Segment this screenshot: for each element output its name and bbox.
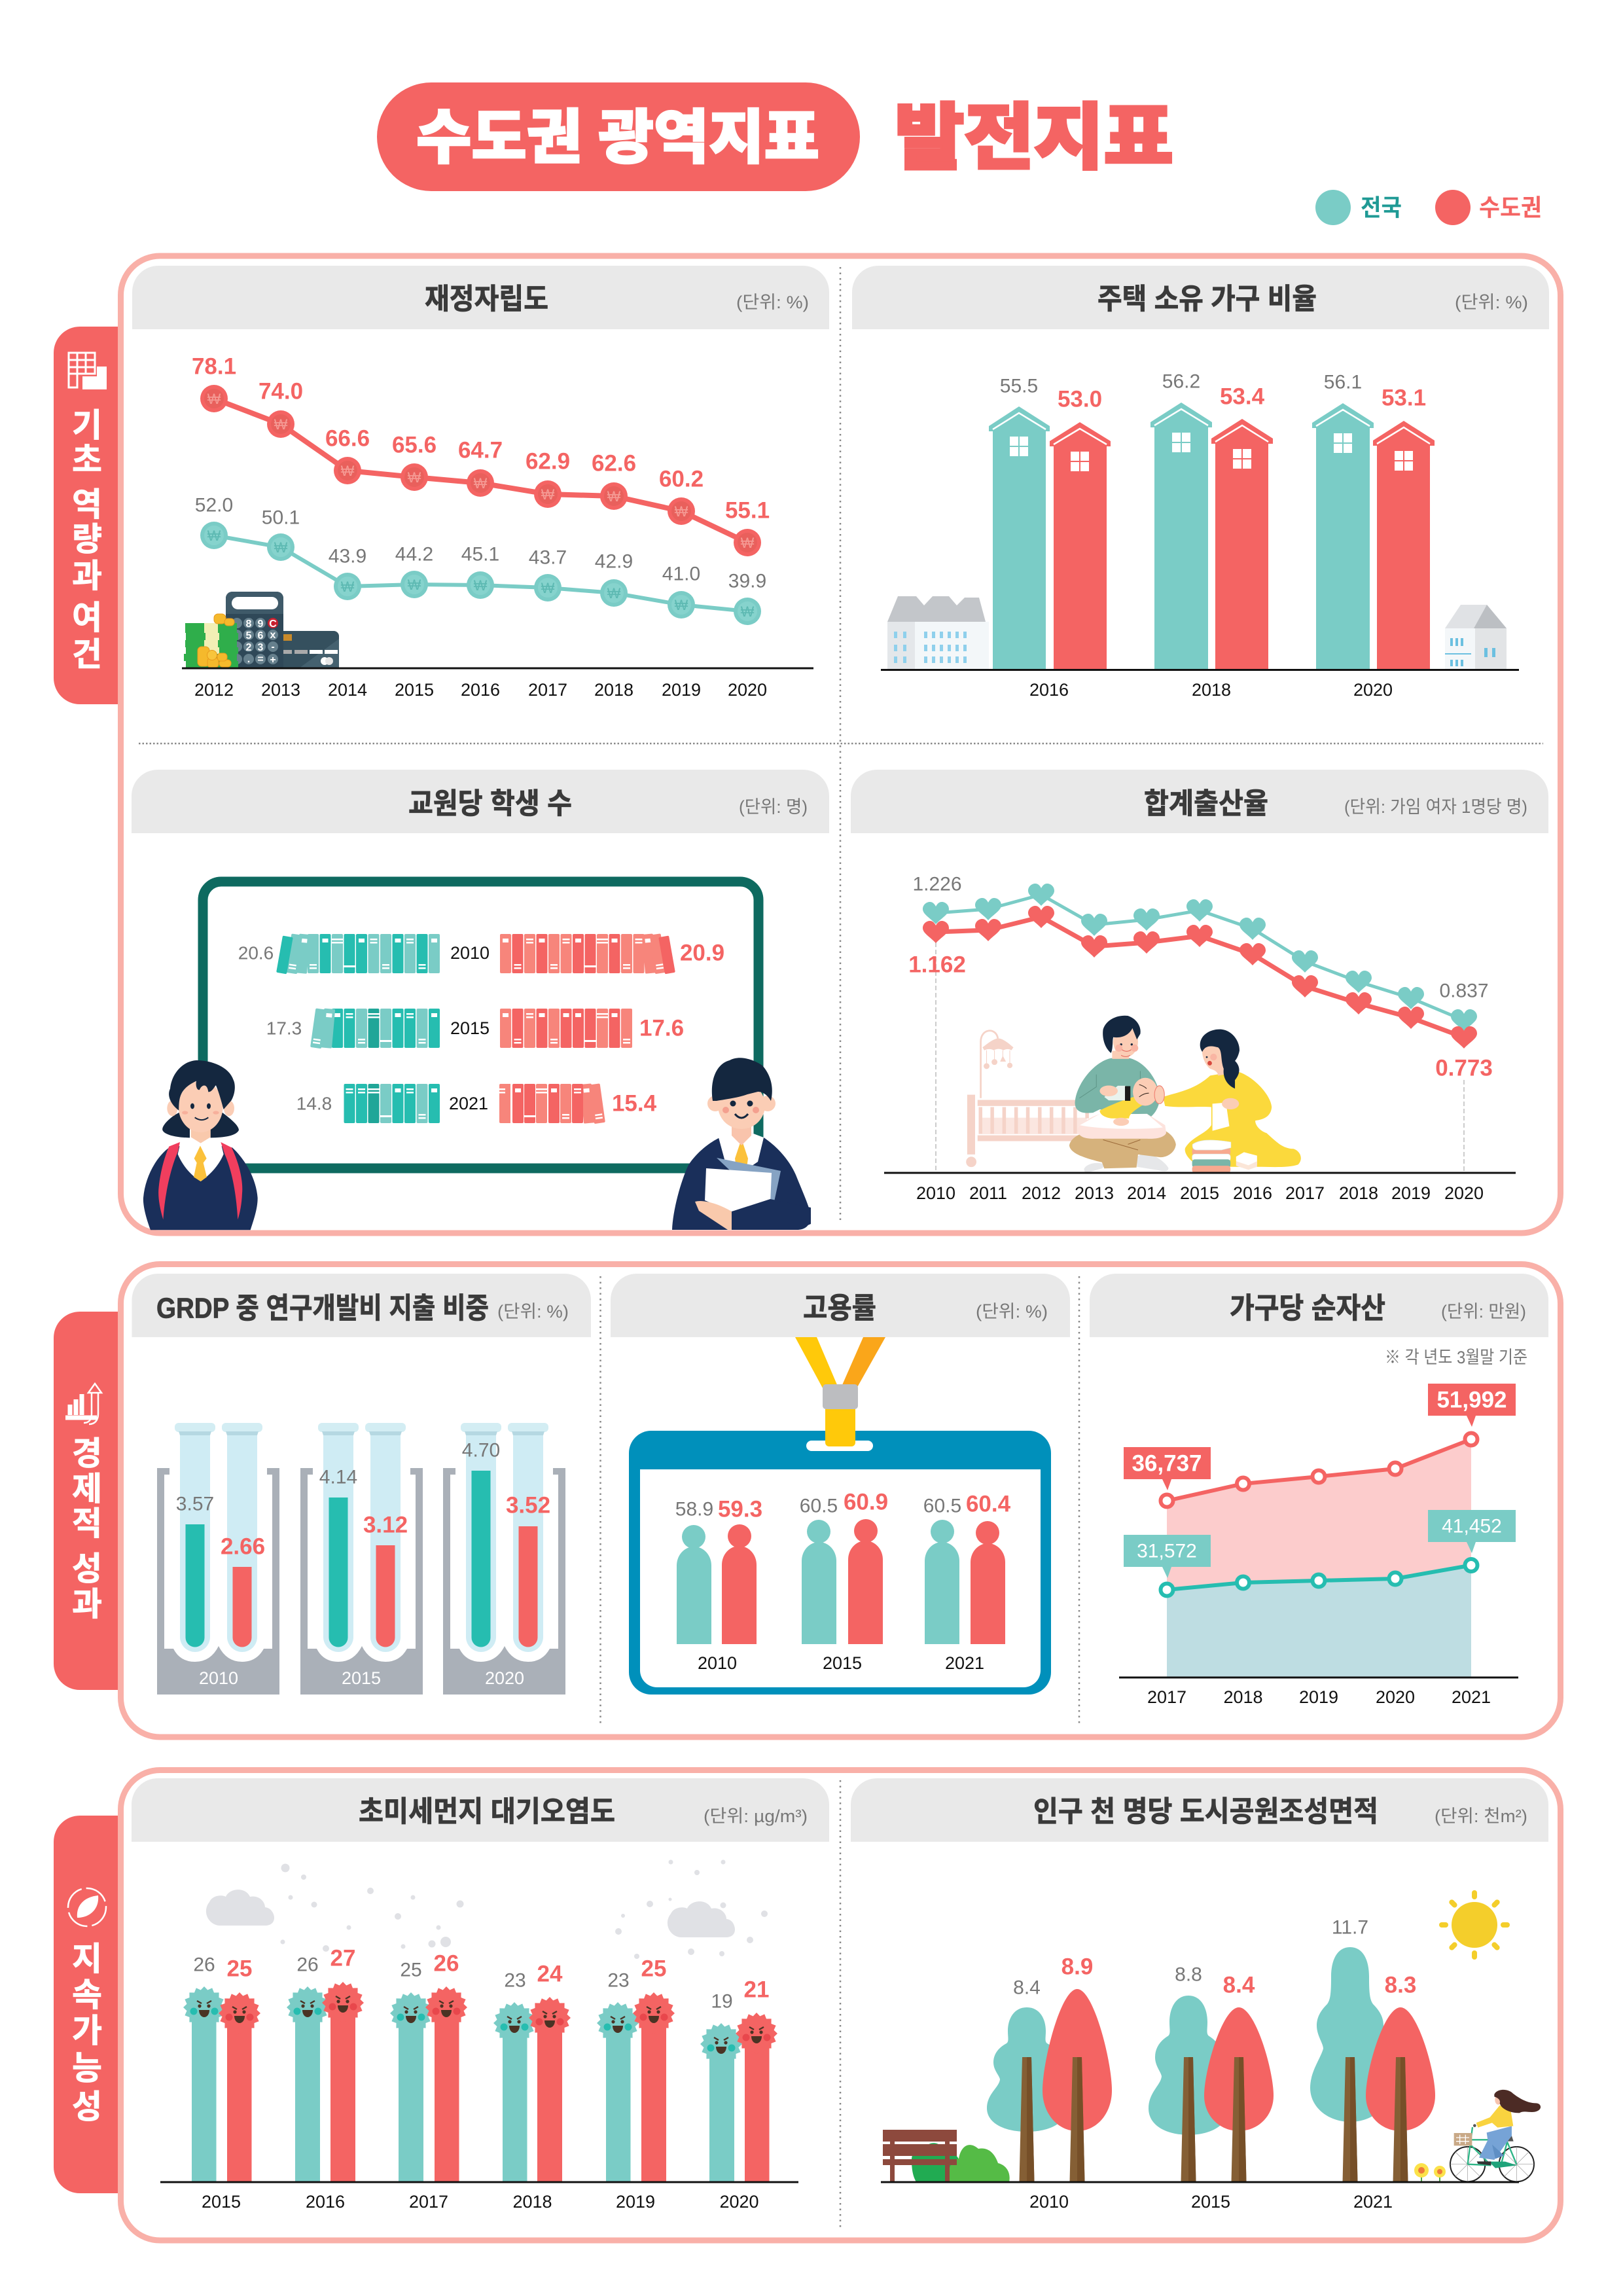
house bars (989, 403, 1435, 670)
chart: 재정자립도: 65.6 (392, 432, 437, 458)
legend: 수도권 (1479, 194, 1542, 221)
chart: GRDP 중 연구개발비 지출 비중: 4.14 (319, 1466, 357, 1488)
chart: 가구당 순자산: 가구당 순자산 (1230, 1292, 1385, 1325)
chart: 재정자립도 (132, 266, 829, 700)
chart: 합계출산율: 2014 (1127, 1183, 1166, 1203)
icon: calculator, money and card: 2 (246, 642, 252, 653)
chart: 초미세먼지 대기오염도: 2019 (616, 2192, 655, 2212)
chart: 초미세먼지 대기오염도: 2015 (202, 2192, 241, 2212)
chart: 초미세먼지 대기오염도: 19 (711, 1991, 733, 2012)
books row 2021: 2021 (449, 1094, 488, 1113)
callout: 51,992: 51,992 (1436, 1388, 1507, 1412)
chart: 재정자립도: 재정자립도 (425, 283, 548, 315)
chart: GRDP 중 연구개발비 지출 비중: 2015 (342, 1668, 381, 1688)
chart: 합계출산율: 2020 (1444, 1183, 1484, 1203)
chart: 초미세먼지 대기오염도: 23 (607, 1970, 630, 1991)
legend: 전국 (1361, 194, 1402, 221)
chart: 재정자립도: 45.1 (461, 543, 499, 565)
chart: 가구당 순자산 (1090, 1274, 1548, 1707)
section tab: 지속가능성: 속 (72, 1977, 102, 2013)
chart: 주택 소유 가구 비율: (단위: %) (1455, 293, 1528, 312)
chart: 합계출산율: 2013 (1075, 1183, 1114, 1203)
icon: calculator, money and card: . (247, 654, 250, 665)
books row 2021: 15.4 (612, 1090, 657, 1117)
panel: 지속가능성 (120, 1770, 1560, 2240)
icon: right house (1445, 605, 1507, 670)
section tab: 경제적 성과: 제 (72, 1471, 102, 1507)
chart: 재정자립도: 2015 (395, 680, 434, 700)
section tab: 기초 역량과 여건: 기 (72, 407, 102, 444)
chart: 재정자립도: 62.6 (592, 450, 636, 476)
chart: 고용률: 2015 (823, 1653, 862, 1673)
chart: 인구 천 명당 도시공원조성면적: 인구 천 명당 도시공원조성면적 (1033, 1796, 1378, 1827)
section tab: 기초 역량과 여건: 초 (72, 442, 102, 478)
icon: calculator, money and card: 6 (258, 630, 264, 641)
chart: GRDP 중 연구개발비 지출 비중: 2010 (199, 1668, 238, 1688)
chart: GRDP 중 연구개발비 지출 비중: 4.70 (462, 1440, 500, 1461)
chart: 초미세먼지 대기오염도: 25 (641, 1956, 666, 1982)
section tab: 기초 역량과 여건: 역 (72, 486, 102, 523)
chart: 인구 천 명당 도시공원조성면적: 8.3 (1385, 1973, 1416, 1998)
section tab: 기초 역량과 여건: 량 (72, 521, 102, 558)
icon: calculator, money and card: = (257, 654, 264, 665)
icon: left building (887, 596, 989, 670)
chart: 교원당 학생 수 (132, 770, 829, 1230)
books row 2021 (296, 1083, 657, 1124)
chart: 초미세먼지 대기오염도 (132, 1778, 829, 2212)
chart: 가구당 순자산: 2019 (1299, 1687, 1338, 1707)
panel: 경제적 성과 (120, 1265, 1560, 1737)
icon: calculator, money and card: C (269, 619, 277, 630)
chart: 고용률: (단위: %) (976, 1302, 1048, 1321)
chart: 고용률: 고용률 (803, 1292, 876, 1325)
books row 2021: 14.8 (296, 1093, 332, 1114)
icon: calculator, money and card: + (270, 655, 276, 666)
chart: 주택 소유 가구 비율: 2018 (1192, 680, 1231, 700)
bars with dust monsters (183, 1982, 777, 2182)
chart: 인구 천 명당 도시공원조성면적: 8.4 (1013, 1977, 1041, 1999)
title: 수도권 광역지표 (416, 105, 819, 171)
chart: 합계출산율: 2017 (1285, 1183, 1325, 1203)
chart: 가구당 순자산: ※ 각 년도 3월말 기준 (1385, 1348, 1527, 1367)
chart: GRDP 중 연구개발비 지출 비중 (132, 1274, 591, 1695)
chart: 재정자립도: 55.1 (725, 497, 770, 524)
section tab: 지속가능성: 능 (72, 2050, 102, 2087)
chart: 재정자립도: 64.7 (458, 437, 503, 463)
chart: 고용률: 60.5 (923, 1495, 961, 1517)
chart: 재정자립도: 2019 (662, 680, 701, 700)
chart: 재정자립도: 44.2 (395, 543, 433, 565)
chart: 초미세먼지 대기오염도: 25 (400, 1960, 422, 1981)
chart: 인구 천 명당 도시공원조성면적: 11.7 (1332, 1916, 1368, 1939)
chart: GRDP 중 연구개발비 지출 비중: 2.66 (221, 1534, 265, 1559)
chart: 재정자립도: 62.9 (526, 449, 570, 474)
title: 발전지표 (895, 98, 1173, 178)
chart: 초미세먼지 대기오염도: (단위: µg/m³) (704, 1806, 808, 1826)
chart: 재정자립도: 2016 (461, 680, 500, 700)
chart: 재정자립도: 78.1 (192, 353, 236, 380)
chart: 가구당 순자산: (단위: 만원) (1441, 1302, 1526, 1321)
icon: calculator, money and card: 9 (258, 619, 264, 630)
chart: 고용률: 60.4 (966, 1491, 1011, 1517)
books row 2015: 17.3 (266, 1018, 302, 1038)
blackboard (203, 882, 758, 1168)
chart: GRDP 중 연구개발비 지출 비중: 3.52 (506, 1492, 550, 1518)
chart: 재정자립도: 2014 (328, 680, 367, 700)
chart: 고용률 (611, 1274, 1070, 1695)
chart: 인구 천 명당 도시공원조성면적: 2010 (1029, 2192, 1069, 2212)
callout: 31,572: 31,572 (1137, 1541, 1197, 1562)
chart: 초미세먼지 대기오염도: 2016 (306, 2192, 345, 2212)
chart: 초미세먼지 대기오염도: 26 (296, 1954, 319, 1975)
chart: 주택 소유 가구 비율 (852, 266, 1549, 700)
chart: 인구 천 명당 도시공원조성면적: 8.8 (1175, 1964, 1202, 1986)
chart: 합계출산율: 0.837 (1439, 980, 1489, 1001)
chart: 가구당 순자산: 2021 (1452, 1687, 1491, 1707)
chart: 초미세먼지 대기오염도: 24 (537, 1961, 563, 1987)
chart: 재정자립도: 52.0 (195, 495, 233, 516)
trees (987, 1947, 1435, 2182)
chart: 초미세먼지 대기오염도: 25 (227, 1956, 252, 1982)
books row 2015: 17.6 (639, 1016, 684, 1041)
section tab: 지속가능성: 지 (72, 1941, 102, 1977)
chart: 합계출산율: 합계출산율 (1144, 788, 1268, 819)
section tab: 지속가능성 (54, 1816, 124, 2193)
people bars (677, 1519, 1005, 1644)
chart: 초미세먼지 대기오염도: 26 (434, 1950, 459, 1977)
illustration: crib (966, 1031, 1095, 1167)
chart: 합계출산율: 2011 (969, 1183, 1007, 1203)
chart: GRDP 중 연구개발비 지출 비중: GRDP 중 연구개발비 지출 비중 (156, 1292, 489, 1325)
chart: 인구 천 명당 도시공원조성면적: 2015 (1191, 2192, 1230, 2212)
chart: 재정자립도: 2013 (261, 680, 300, 700)
chart: 주택 소유 가구 비율: 주택 소유 가구 비율 (1097, 283, 1317, 315)
chart: 합계출산율: 2019 (1391, 1183, 1431, 1203)
icon: calculator, money and card: 5 (246, 630, 252, 641)
chart: 재정자립도: 66.6 (325, 425, 370, 452)
callout: 31,572 (1124, 1535, 1211, 1578)
section tab: 기초 역량과 여건 (54, 327, 124, 704)
chart: 초미세먼지 대기오염도: 23 (504, 1970, 526, 1991)
chart: 합계출산율: 2010 (916, 1183, 955, 1203)
illustration: girl student (143, 1060, 258, 1230)
id card with lanyard (629, 1337, 1051, 1695)
chart: 고용률: 2021 (945, 1653, 984, 1673)
chart: 초미세먼지 대기오염도: 2017 (409, 2192, 448, 2212)
chart: 초미세먼지 대기오염도: 초미세먼지 대기오염도 (359, 1796, 615, 1827)
books row 2010: 2010 (450, 943, 490, 963)
books row 2015: 2015 (450, 1018, 490, 1038)
chart: 재정자립도: 43.7 (529, 547, 567, 568)
section tab: 경제적 성과: 과 (72, 1586, 102, 1623)
chart: GRDP 중 연구개발비 지출 비중: 2020 (485, 1668, 524, 1688)
section tab: 기초 역량과 여건: 여 (72, 600, 102, 636)
books row 2010 (238, 933, 724, 974)
callout: 51,992 (1428, 1384, 1516, 1427)
icon: flowers (1414, 2163, 1446, 2182)
chart: 주택 소유 가구 비율: 55.5 (1000, 376, 1038, 397)
chart: 인구 천 명당 도시공원조성면적: (단위: 천m²) (1435, 1806, 1527, 1826)
chart: 주택 소유 가구 비율: 53.1 (1382, 385, 1426, 411)
chart: 초미세먼지 대기오염도: 21 (744, 1977, 769, 2003)
icon: calculator, money and card: 8 (246, 619, 252, 630)
icon: calculator, money and card: 3 (258, 642, 264, 653)
chart: 재정자립도: 42.9 (595, 551, 633, 572)
illustration: mother and towels (1154, 1030, 1301, 1173)
chart: 합계출산율: 2016 (1233, 1183, 1272, 1203)
chart: 초미세먼지 대기오염도: 26 (193, 1954, 215, 1975)
chart: 재정자립도: (단위: %) (736, 293, 809, 312)
chart: 가구당 순자산: 2020 (1376, 1687, 1415, 1707)
section tab: 기초 역량과 여건: 건 (72, 636, 102, 673)
icon: calculator, money and card (184, 592, 339, 668)
chart: 합계출산율: (단위: 가임 여자 1명당 명) (1344, 797, 1527, 817)
chart: 주택 소유 가구 비율: 53.4 (1220, 384, 1265, 410)
chart: GRDP 중 연구개발비 지출 비중: 3.12 (363, 1512, 408, 1538)
section tab: 경제적 성과: 적 (72, 1505, 102, 1542)
dust clouds and particles (206, 1860, 768, 1959)
books row 2015 (266, 1008, 684, 1049)
callout: 36,737: 36,737 (1132, 1450, 1202, 1477)
chart: 합계출산율: 2012 (1022, 1183, 1061, 1203)
chart: 주택 소유 가구 비율: 56.1 (1324, 372, 1362, 393)
icon: sun (1439, 1890, 1510, 1960)
chart: 합계출산율: 0.773 (1435, 1055, 1493, 1081)
chart: 합계출산율 (851, 770, 1548, 1203)
chart: 고용률: 2010 (698, 1653, 737, 1673)
chart: 초미세먼지 대기오염도: 2018 (512, 2192, 552, 2212)
chart: 재정자립도: 43.9 (329, 546, 366, 567)
chart: 가구당 순자산: 2018 (1223, 1687, 1263, 1707)
chart: 합계출산율: 1.226 (912, 873, 962, 895)
chart: 재정자립도: 60.2 (659, 466, 704, 492)
chart: 가구당 순자산: 2017 (1147, 1687, 1186, 1707)
icon: cyclist (1450, 2090, 1541, 2181)
chart: 인구 천 명당 도시공원조성면적 (851, 1778, 1548, 2212)
chart: 재정자립도: 2017 (528, 680, 567, 700)
icon: bench and bush (883, 2130, 1010, 2182)
chart: GRDP 중 연구개발비 지출 비중: (단위: %) (497, 1302, 569, 1321)
books row 2010: 20.9 (680, 940, 724, 966)
chart: GRDP 중 연구개발비 지출 비중: 3.57 (176, 1494, 214, 1515)
illustration: father and baby (1069, 1016, 1176, 1173)
chart: 재정자립도: 39.9 (728, 571, 766, 592)
chart: 주택 소유 가구 비율: 2020 (1353, 680, 1393, 700)
chart: 주택 소유 가구 비율: 56.2 (1162, 370, 1200, 393)
books row 2010: 20.6 (238, 942, 274, 963)
section tab: 경제적 성과: 성 (72, 1551, 102, 1587)
chart: 합계출산율: 2015 (1180, 1183, 1219, 1203)
chart: 초미세먼지 대기오염도: 2020 (719, 2192, 759, 2212)
callout: 41,452 (1428, 1510, 1516, 1553)
section tab: 지속가능성: 가 (72, 2013, 102, 2049)
chart: 재정자립도: 50.1 (262, 507, 300, 529)
icon: calculator, money and card: - (271, 641, 275, 653)
chart: 주택 소유 가구 비율: 2016 (1029, 680, 1069, 700)
chart: 인구 천 명당 도시공원조성면적: 8.9 (1061, 1954, 1093, 1979)
chart: 고용률: 59.3 (718, 1496, 762, 1522)
section tab: 기초 역량과 여건: 과 (72, 558, 102, 594)
callout: 36,737 (1124, 1447, 1211, 1490)
chart: 고용률: 58.9 (675, 1499, 713, 1520)
chart: 재정자립도: 2020 (728, 680, 767, 700)
chart: 재정자립도: 74.0 (259, 378, 303, 404)
chart: 인구 천 명당 도시공원조성면적: 2021 (1353, 2192, 1393, 2212)
chart: 교원당 학생 수: (단위: 명) (739, 797, 808, 817)
chart: 합계출산율: 1.162 (908, 952, 966, 978)
chart: 고용률: 60.9 (844, 1490, 888, 1515)
chart: 인구 천 명당 도시공원조성면적: 8.4 (1223, 1973, 1255, 1998)
section tab: 지속가능성: 성 (72, 2089, 102, 2125)
chart: 초미세먼지 대기오염도: 27 (330, 1945, 355, 1971)
chart: 교원당 학생 수: 교원당 학생 수 (408, 788, 572, 819)
chart: 합계출산율: 2018 (1339, 1183, 1378, 1203)
title (377, 82, 1173, 191)
chart: 고용률: 60.5 (800, 1495, 838, 1517)
panel: 기초 역량과 여건 (120, 256, 1560, 1233)
section tab: 경제적 성과: 경 (72, 1435, 102, 1472)
chart: 재정자립도: 2012 (194, 680, 234, 700)
section tab: 경제적 성과 (54, 1312, 124, 1690)
chart: 주택 소유 가구 비율: 53.0 (1058, 386, 1102, 412)
chart: 재정자립도: 41.0 (662, 563, 700, 585)
icon: calculator, money and card: x (270, 630, 276, 641)
callout: 41,452: 41,452 (1442, 1516, 1502, 1537)
illustration: boy student (672, 1058, 811, 1230)
legend (1315, 190, 1542, 225)
chart: 재정자립도: 2018 (594, 680, 633, 700)
